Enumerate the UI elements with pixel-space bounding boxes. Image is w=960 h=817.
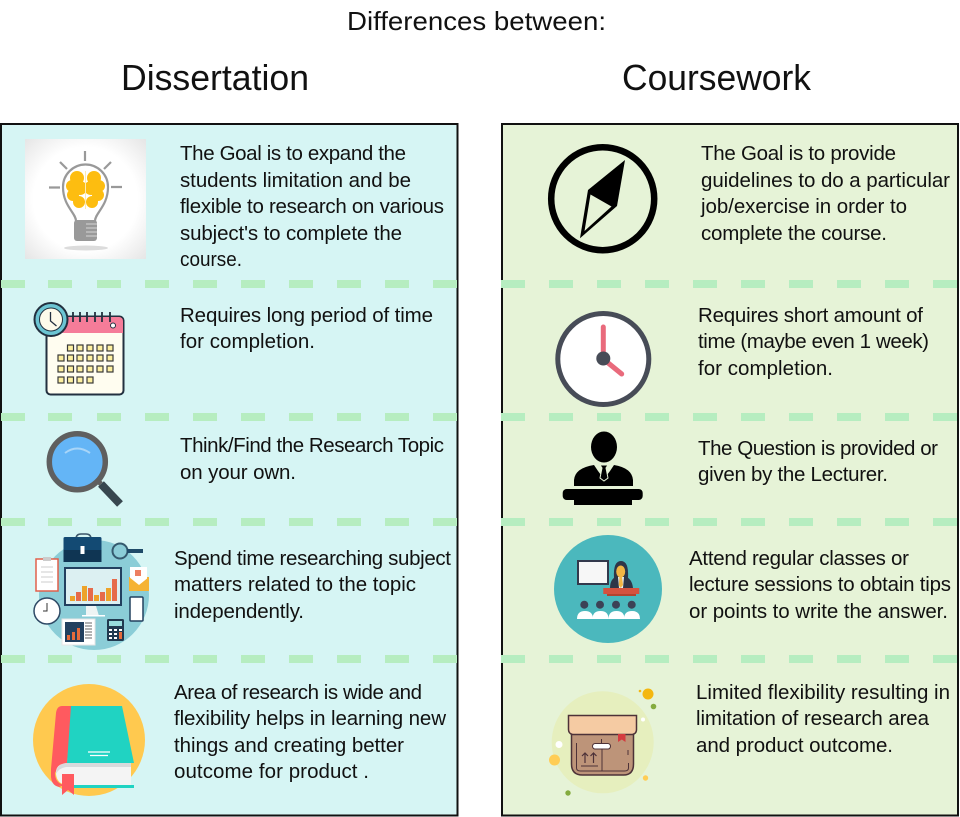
text: dissertation topic: [180, 434, 444, 484]
text: dissertation time: Requires long period of time: [180, 304, 433, 327]
text: dissertation topic: Think/Find the Research Topic: [180, 434, 444, 457]
text: coursework question: The Question is provided or: [698, 437, 938, 460]
panel: dissertation: [1, 124, 458, 816]
text: dissertation area: things and creating better: [174, 734, 404, 757]
text: dissertation goal: The Goal is to expand the: [180, 142, 406, 165]
text: coursework flexibility: limitation of research area: [696, 707, 930, 730]
text: coursework question: [698, 437, 938, 486]
icon: lecturer at podium: [563, 432, 643, 505]
icon: magnifying glass: [49, 434, 120, 504]
text: coursework time: [698, 304, 929, 380]
text: dissertation area: flexibility helps in learning new: [174, 707, 446, 730]
text: dissertation research: Spend time researching subject: [174, 547, 451, 570]
text: dissertation research: independently.: [174, 600, 304, 623]
icon: clock: [558, 314, 649, 404]
text: dissertation topic: on your own.: [180, 461, 296, 484]
panel: coursework: [501, 124, 958, 816]
text: coursework time: Requires short amount of: [698, 304, 923, 327]
text: coursework question: given by the Lecturer.: [698, 463, 888, 486]
text: dissertation goal: flexible to research on various: [180, 195, 444, 218]
text: dissertation area: Area of research is wide and: [174, 681, 422, 704]
text: dissertation area: [174, 681, 446, 783]
icon: calendar with clock: [34, 303, 124, 394]
text: coursework time: time (maybe even 1 week): [698, 330, 929, 353]
icon: classroom: [554, 535, 662, 643]
text: coursework goal: complete the course.: [701, 222, 887, 245]
text: dissertation time: for completion.: [180, 330, 315, 353]
text: dissertation goal: [180, 142, 444, 271]
heading: Coursework: Coursework: [622, 57, 812, 98]
text: dissertation research: [174, 547, 451, 623]
text: dissertation area: outcome for product .: [174, 760, 369, 783]
text: dissertation goal: subject's to complete the: [180, 222, 402, 245]
text: dissertation goal: students limitation and be: [180, 169, 411, 192]
text: coursework classes: or points to write the answer.: [689, 600, 948, 623]
text: coursework time: for completion.: [698, 357, 833, 380]
icon: book: [33, 684, 145, 796]
text: dissertation goal: course.: [180, 248, 242, 271]
text: coursework goal: guidelines to do a particular: [701, 169, 950, 192]
icon: light bulb with brain: [25, 139, 146, 259]
text: dissertation time: [180, 304, 433, 353]
text: coursework flexibility: [696, 681, 950, 757]
heading: Dissertation: Dissertation: [121, 57, 309, 98]
text: coursework flexibility: Limited flexibility resulting in: [696, 681, 950, 704]
icon: cardboard box: [549, 688, 656, 796]
text: coursework classes: Attend regular classes or: [689, 547, 909, 570]
text: coursework classes: lecture sessions to obtain tips: [689, 573, 951, 596]
title: Differences between:: [347, 6, 606, 36]
icon: compass: [551, 147, 654, 250]
text: coursework goal: The Goal is to provide: [701, 142, 896, 165]
text: coursework goal: job/exercise in order to: [700, 195, 907, 218]
text: coursework goal: [700, 142, 950, 245]
text: coursework classes: [689, 547, 951, 623]
text: coursework flexibility: and product outcome.: [696, 734, 893, 757]
text: dissertation research: matters related to the topic: [174, 573, 416, 596]
icon: research cluster: [34, 534, 149, 650]
